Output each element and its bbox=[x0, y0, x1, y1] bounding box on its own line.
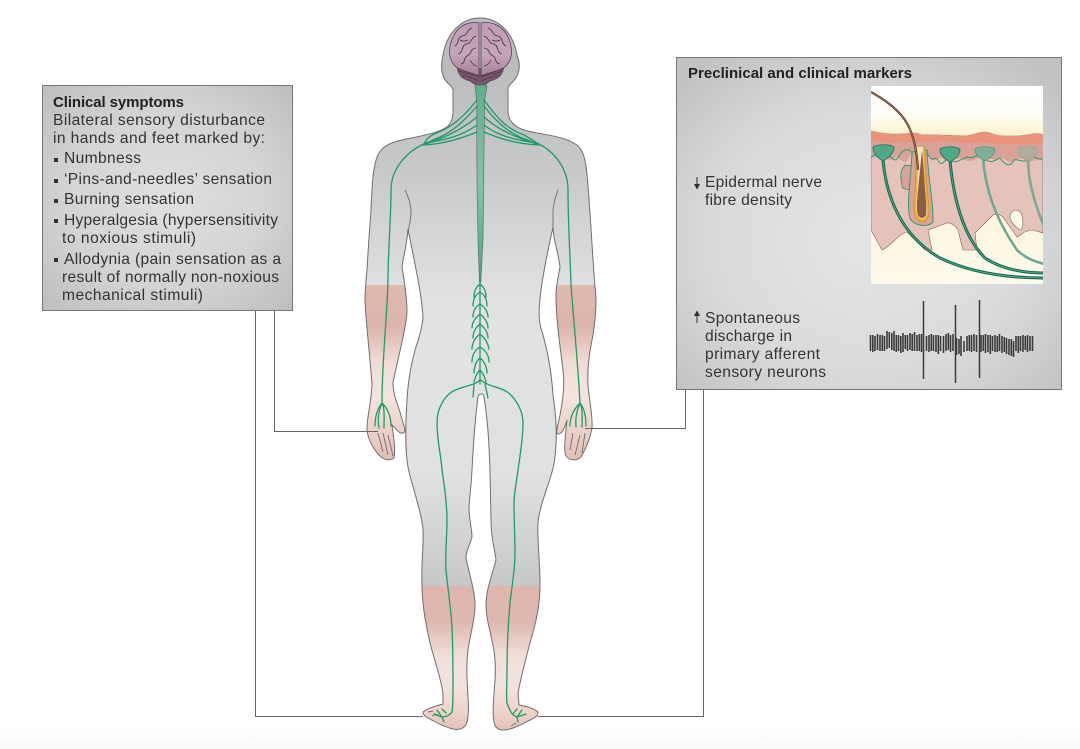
arm nerves bbox=[382, 143, 426, 403]
shoulder plexus left bbox=[423, 100, 477, 145]
dermis bbox=[871, 131, 1043, 250]
white gap in dermis bbox=[1010, 210, 1023, 230]
panel: preclinical and clinical markers bbox=[676, 58, 1062, 390]
follicle sheath bbox=[908, 150, 933, 225]
text: spontaneous discharge: sensory neurons bbox=[705, 364, 826, 381]
icon: up arrow bbox=[694, 312, 700, 323]
foot branches bbox=[434, 709, 526, 722]
brain bbox=[450, 23, 511, 85]
symptoms text: in hands and feet marked by: bbox=[53, 130, 265, 147]
hair follicle and shaft bbox=[871, 92, 929, 222]
dark nerve fibres bbox=[883, 160, 1045, 278]
text: epidermal nerve fibre density: Epidermal nerve bbox=[705, 174, 822, 191]
nerves bbox=[375, 100, 586, 722]
rete green line bbox=[871, 150, 1043, 165]
symptoms text: Hyperalgesia (hypersensitivity bbox=[64, 212, 278, 229]
symptoms text: ‘Pins-and-needles’ sensation bbox=[64, 171, 272, 188]
faded nerve fibres bbox=[883, 158, 1045, 278]
human body figure bbox=[364, 18, 596, 730]
body silhouette bbox=[366, 18, 596, 730]
symptoms text: Burning sensation bbox=[64, 191, 194, 208]
connector lines bbox=[256, 310, 704, 716]
text: spontaneous discharge bbox=[705, 310, 826, 381]
text: spontaneous discharge: primary afferent bbox=[705, 346, 821, 363]
symptoms text: Bilateral sensory disturbance bbox=[53, 112, 265, 129]
dermal peg bbox=[901, 165, 913, 190]
skin cross-section bbox=[871, 86, 1045, 284]
symptoms text: mechanical stimuli) bbox=[62, 287, 203, 304]
symptoms text: to noxious stimuli) bbox=[62, 230, 196, 247]
armpit and finger creases bbox=[378, 190, 585, 726]
background fade bbox=[0, 730, 1080, 749]
symptoms text: Allodynia (pain sensation as a bbox=[64, 251, 281, 268]
symptoms text: Numbness bbox=[64, 150, 141, 167]
text: epidermal nerve fibre density bbox=[705, 174, 822, 209]
panel: clinical symptoms bbox=[42, 86, 292, 310]
icon: down arrow bbox=[694, 177, 700, 188]
epidermis salmon layer bbox=[871, 131, 1043, 144]
spinal cord bbox=[475, 85, 487, 282]
body outline bbox=[365, 18, 596, 730]
cauda equina bbox=[479, 282, 481, 384]
text: spontaneous discharge: Spontaneous bbox=[705, 310, 800, 327]
shoulder plexus right bbox=[484, 100, 540, 145]
spike train chart bbox=[870, 300, 1032, 383]
nerve endings bbox=[873, 145, 1038, 162]
symptoms text: result of normally non-noxious bbox=[62, 269, 279, 286]
text: epidermal nerve fibre density: fibre density bbox=[705, 192, 792, 209]
heading: preclinical and clinical markers: Preclinical and clinical markers bbox=[688, 65, 912, 82]
heading: clinical symptoms: Clinical symptoms bbox=[53, 94, 184, 111]
epidermis basal layer bbox=[871, 131, 1043, 162]
text: spontaneous discharge: discharge in bbox=[705, 328, 792, 345]
symptoms text bbox=[53, 112, 281, 304]
hand branches bbox=[375, 403, 391, 428]
leg nerves bbox=[437, 380, 480, 717]
